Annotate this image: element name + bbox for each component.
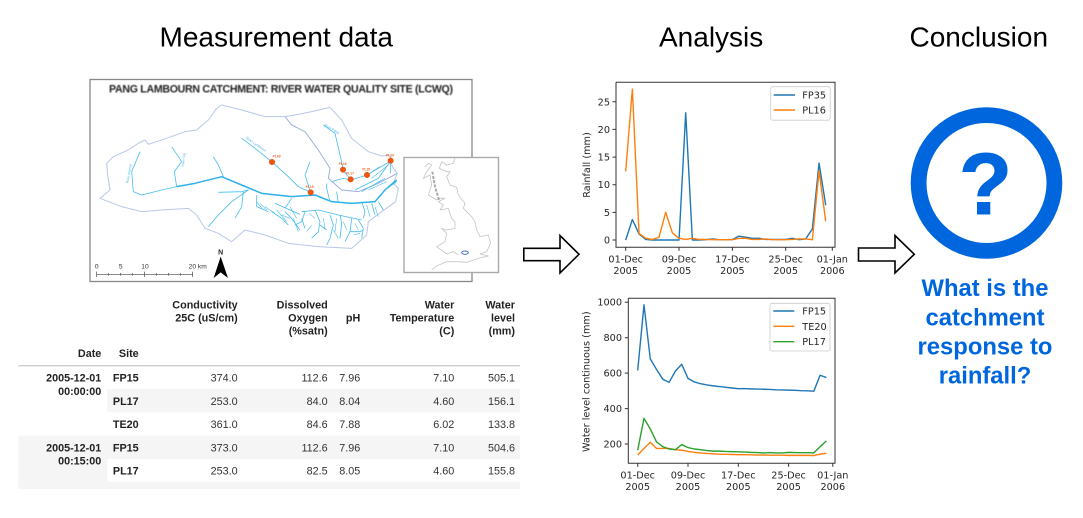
table header: Oxygen xyxy=(288,313,328,325)
conclusion question text: response to xyxy=(918,334,1052,361)
table rows: 7.10 xyxy=(433,373,454,385)
table header: level xyxy=(491,313,515,325)
table rows: 156.1 xyxy=(488,396,515,408)
rainfall y tick labels: 0 xyxy=(604,236,610,246)
sub-catchment divide xyxy=(285,117,397,192)
table header: Date xyxy=(78,348,101,360)
table rows: FP15 xyxy=(113,442,139,454)
table rows: TE20 xyxy=(113,419,139,431)
table header: Water xyxy=(485,300,516,312)
table rows: 373.0 xyxy=(211,442,238,454)
rainfall x tick labels: 09-Dec xyxy=(662,254,696,265)
water level x tick labels: 2005 xyxy=(625,482,650,493)
table rows: 155.8 xyxy=(488,465,515,477)
catchment drawing xyxy=(95,105,398,278)
table rows: 8.04 xyxy=(339,396,360,408)
rainfall x tick labels: 01-Jan xyxy=(817,254,848,265)
rainfall x tick labels xyxy=(608,254,848,277)
table rows: 2005-12-01 xyxy=(46,442,101,454)
rainfall x tick labels: 2005 xyxy=(613,266,638,277)
rainfall legend: PL16 xyxy=(802,106,826,116)
table header: (C) xyxy=(439,326,455,338)
table rows xyxy=(46,373,515,477)
rainfall y tick labels: 25 xyxy=(598,97,610,108)
table rows: 84.6 xyxy=(307,419,328,431)
table rows: 00:00:00 xyxy=(58,386,101,398)
heading: Conclusion: Conclusion xyxy=(910,22,1048,53)
table rows: 8.05 xyxy=(339,465,360,477)
rainfall y tick labels: 10 xyxy=(598,180,610,191)
table rows: 112.6 xyxy=(301,442,328,454)
rainfall x tick labels: 2005 xyxy=(773,266,798,277)
water level y tick labels: 200 xyxy=(604,440,622,450)
scale bar: 5 xyxy=(119,263,123,270)
table header: Conductivity xyxy=(172,300,238,312)
conclusion question text: What is the xyxy=(922,275,1048,302)
water level y tick labels xyxy=(597,298,622,450)
rainfall x tick labels: 25-Dec xyxy=(768,254,803,265)
conclusion question text: catchment xyxy=(925,304,1045,331)
monitoring sites: PL16 xyxy=(339,162,347,166)
rainfall series xyxy=(626,89,826,240)
scale bar: 10 xyxy=(141,263,149,270)
table rows: PL17 xyxy=(113,396,139,408)
water level legend: TE20 xyxy=(801,322,827,333)
table rows: 504.6 xyxy=(488,442,515,454)
table header: Temperature xyxy=(390,313,454,325)
table rows: 112.6 xyxy=(301,373,328,385)
rainfall x tick labels: 2005 xyxy=(667,266,691,277)
rainfall x tick labels: 2005 xyxy=(720,266,745,277)
rainfall x tick labels: 2006 xyxy=(820,266,845,277)
water level legend: PL17 xyxy=(802,337,826,348)
monitoring sites: PL09 xyxy=(273,154,281,158)
conclusion question text: rainfall? xyxy=(939,362,1031,389)
rainfall x tick labels: 01-Dec xyxy=(608,254,643,265)
water level x tick labels: 2005 xyxy=(776,482,801,493)
water level y tick labels: 800 xyxy=(604,333,622,344)
table rows: 253.0 xyxy=(211,396,238,408)
table header: Site xyxy=(119,348,139,360)
water level x tick labels: 09-Dec xyxy=(671,470,705,481)
monitoring sites: PL20 xyxy=(362,168,370,172)
water level x tick labels: 2005 xyxy=(676,482,700,493)
north arrow: N xyxy=(218,249,223,256)
scale bar: 0 xyxy=(95,263,99,270)
water level legend xyxy=(770,303,830,351)
river name labels xyxy=(125,123,340,184)
table header: (mm) xyxy=(489,326,515,338)
chart: water level line chart xyxy=(582,298,848,493)
panel: catchment map xyxy=(90,80,498,282)
rainfall y axis title: Rainfall (mm) xyxy=(582,132,593,198)
table rows: 4.60 xyxy=(433,396,454,408)
scale bar: 20 km xyxy=(189,263,207,270)
table row shading xyxy=(18,389,520,489)
table rows: 6.02 xyxy=(433,419,454,431)
monitoring sites: PL17 xyxy=(346,172,354,176)
rainfall axes xyxy=(616,82,835,247)
heading: Measurement data: Measurement data xyxy=(160,22,393,53)
north arrow xyxy=(214,249,228,278)
icon: question mark in circle: ? xyxy=(959,136,1012,233)
arrow: analysis to conclusion xyxy=(858,236,914,273)
table header: pH xyxy=(346,313,360,325)
water level y tick labels: 600 xyxy=(604,369,622,380)
rainfall y tick labels xyxy=(598,97,610,246)
water level axes xyxy=(628,298,835,463)
table rows: FP15 xyxy=(113,373,139,385)
table rows: PL17 xyxy=(113,465,139,477)
rainfall y tick labels: 15 xyxy=(598,153,610,164)
inset: Great Britain locator xyxy=(404,158,498,272)
rainfall legend: FP35 xyxy=(802,90,826,102)
water level x tick labels: 2005 xyxy=(726,482,751,493)
table rows: 7.96 xyxy=(339,373,360,385)
table rows: 253.0 xyxy=(211,465,238,477)
table rows: 7.96 xyxy=(339,442,360,454)
icon: question mark in circle xyxy=(919,115,1054,251)
table rows: 133.8 xyxy=(488,419,515,431)
river name labels: River Lambourn xyxy=(245,136,267,153)
river name labels: River Kennet xyxy=(125,164,133,184)
water level y tick labels: 1000 xyxy=(597,298,622,309)
monitoring sites: PL19 xyxy=(386,153,394,157)
water level x tick labels: 25-Dec xyxy=(771,470,806,481)
monitoring sites: PL15 xyxy=(306,185,314,189)
chart: rainfall line chart xyxy=(582,82,848,277)
map frame xyxy=(90,80,472,282)
river network xyxy=(132,125,397,245)
table rows: 374.0 xyxy=(211,373,238,385)
water level x tick labels: 01-Dec xyxy=(620,470,655,481)
river name labels: River Og xyxy=(181,153,186,167)
water level x tick labels: 17-Dec xyxy=(721,470,756,481)
table header: Water xyxy=(425,300,455,312)
water level x tick labels xyxy=(620,470,848,493)
rainfall y tick labels: 20 xyxy=(598,125,610,136)
table rows: 2005-12-01 xyxy=(46,373,101,385)
rainfall x tick labels: 17-Dec xyxy=(715,254,750,265)
table header: (%satn) xyxy=(289,326,328,338)
rainfall y tick labels: 5 xyxy=(604,208,610,219)
table header: 25C (uS/cm) xyxy=(175,313,238,325)
arrow: data to analysis xyxy=(524,236,579,273)
water level x tick labels: 01-Jan xyxy=(817,470,848,481)
water level legend: FP15 xyxy=(802,306,826,318)
water level y axis title: Water level continuous (mm) xyxy=(582,311,592,452)
catchment outline xyxy=(100,105,398,248)
conclusion question text xyxy=(918,275,1052,389)
map title: PANG LAMBOURN CATCHMENT: RIVER WATER QUALITY SITE (LCWQ) xyxy=(109,84,453,96)
scale bar xyxy=(95,263,207,277)
rainfall legend xyxy=(771,87,830,120)
table rows: 505.1 xyxy=(488,373,515,385)
river name labels: River Pang xyxy=(323,123,340,135)
table rows: 361.0 xyxy=(211,419,238,431)
table header xyxy=(78,300,516,360)
monitoring sites xyxy=(269,153,394,195)
panel: measurement data table xyxy=(18,300,520,489)
table header: Dissolved xyxy=(277,300,328,312)
table rows: 4.60 xyxy=(433,465,454,477)
water level y tick labels: 400 xyxy=(604,404,622,415)
heading: Analysis: Analysis xyxy=(659,22,763,53)
water level series xyxy=(638,305,826,456)
table rows: 84.0 xyxy=(307,396,328,408)
table rows: 7.10 xyxy=(433,442,454,454)
water level x tick labels: 2006 xyxy=(820,482,845,493)
table rows: 7.88 xyxy=(339,419,360,431)
table rows: 00:15:00 xyxy=(58,455,101,467)
table rows: 82.5 xyxy=(307,465,328,477)
